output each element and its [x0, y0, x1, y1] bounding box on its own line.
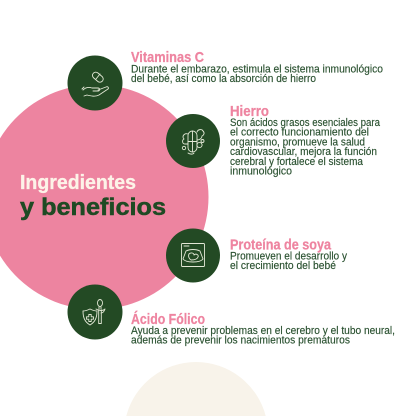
description: el crecimiento del bebé [230, 260, 336, 272]
cream circle at bottom [126, 362, 266, 416]
item: Vitaminas C [68, 50, 383, 110]
description: además de prevenir los nacimientos prematuros [131, 335, 351, 347]
icon: shield and spine [68, 284, 122, 340]
heading: Vitaminas C [131, 50, 204, 66]
heading: Proteína de soya [230, 238, 332, 254]
heading: Hierro [230, 104, 269, 120]
icon: hand holding a capsule [68, 56, 122, 110]
heading: Ácido Fólico [131, 311, 205, 328]
item: Proteína de soya [166, 228, 348, 282]
description: organismo, promueve la salud [230, 136, 365, 148]
description: inmunológico [230, 166, 292, 178]
title: Ingredientes [20, 172, 136, 194]
description: Son ácidos grasos esenciales para [230, 117, 380, 129]
title [20, 172, 166, 221]
icon: capsule with bubbles [166, 114, 220, 168]
description: el correcto funcionamiento del [230, 127, 369, 139]
description: cardiovascular, mejora la función [230, 146, 377, 158]
item: Ácido Fólico [68, 284, 395, 347]
description: del bebé, así como la absorción de hierro [131, 73, 316, 85]
title: y beneficios [20, 194, 166, 221]
large pink circle [0, 85, 209, 310]
icon: ultrasound screen [166, 228, 220, 282]
description: Durante el embarazo, estimula el sistema inmunológico [131, 64, 383, 76]
item: Hierro [166, 104, 380, 178]
description: Ayuda a prevenir problemas en el cerebro y el tubo neural, [131, 325, 395, 337]
description: Promueven el desarrollo y [230, 250, 348, 262]
description [230, 250, 348, 272]
description [131, 325, 395, 347]
description [230, 117, 380, 178]
description [131, 64, 383, 85]
description: cerebral y fortalece el sistema [230, 156, 363, 168]
